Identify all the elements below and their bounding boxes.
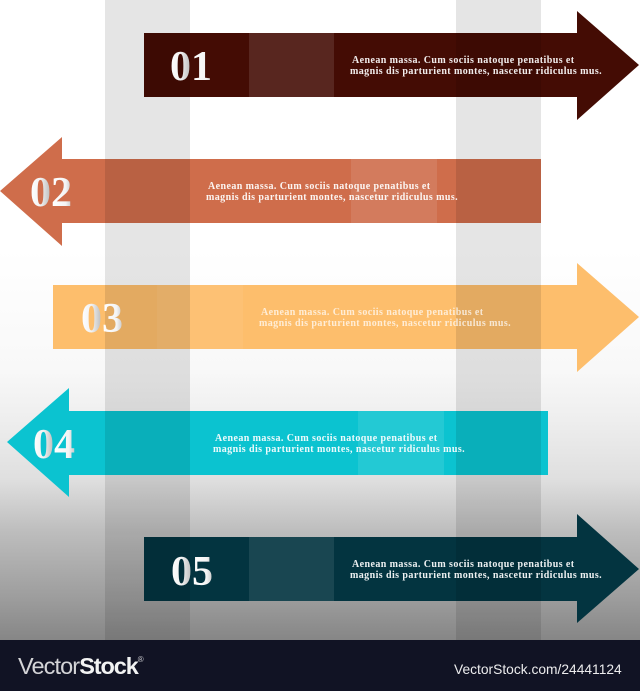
arrow 2 translucent patch	[351, 159, 437, 223]
arrow 5 translucent patch	[249, 537, 334, 601]
vertical band left	[105, 0, 190, 640]
arrow 5: dark teal	[144, 514, 639, 623]
footer logo: ®	[138, 655, 144, 664]
footer bar	[0, 640, 640, 691]
text block 2: magnis dis parturient montes, nascetur ridiculus mus.	[206, 192, 458, 203]
vertical band right	[456, 0, 541, 640]
footer url: VectorStock.com/24441124	[454, 662, 622, 677]
arrow 3 translucent patch	[157, 285, 243, 349]
number 02: 02	[30, 170, 72, 216]
number 03: 03	[81, 296, 123, 342]
footer logo: VectorStock	[18, 653, 138, 679]
text block 5: Aenean massa. Cum sociis natoque penatibus et	[352, 559, 575, 570]
arrow 4: cyan	[7, 388, 548, 497]
number 05: 05	[171, 549, 213, 595]
text block 3: magnis dis parturient montes, nascetur ridiculus mus.	[259, 318, 511, 329]
arrow 3: light orange	[53, 263, 639, 372]
text block 1: magnis dis parturient montes, nascetur ridiculus mus.	[350, 66, 602, 77]
arrow 2: terracotta	[0, 137, 541, 246]
text block 4: magnis dis parturient montes, nascetur ridiculus mus.	[213, 444, 465, 455]
arrow 1 translucent patch	[249, 33, 334, 97]
text block 5: magnis dis parturient montes, nascetur ridiculus mus.	[350, 570, 602, 581]
number 04: 04	[33, 422, 75, 468]
number 01: 01	[170, 44, 212, 90]
text block 2: Aenean massa. Cum sociis natoque penatibus et	[208, 181, 431, 192]
text block 3: Aenean massa. Cum sociis natoque penatibus et	[261, 307, 484, 318]
text block 1: Aenean massa. Cum sociis natoque penatibus et	[352, 55, 575, 66]
arrow 1: dark maroon	[144, 11, 639, 120]
text block 4: Aenean massa. Cum sociis natoque penatibus et	[215, 433, 438, 444]
arrow 4 translucent patch	[358, 411, 444, 475]
